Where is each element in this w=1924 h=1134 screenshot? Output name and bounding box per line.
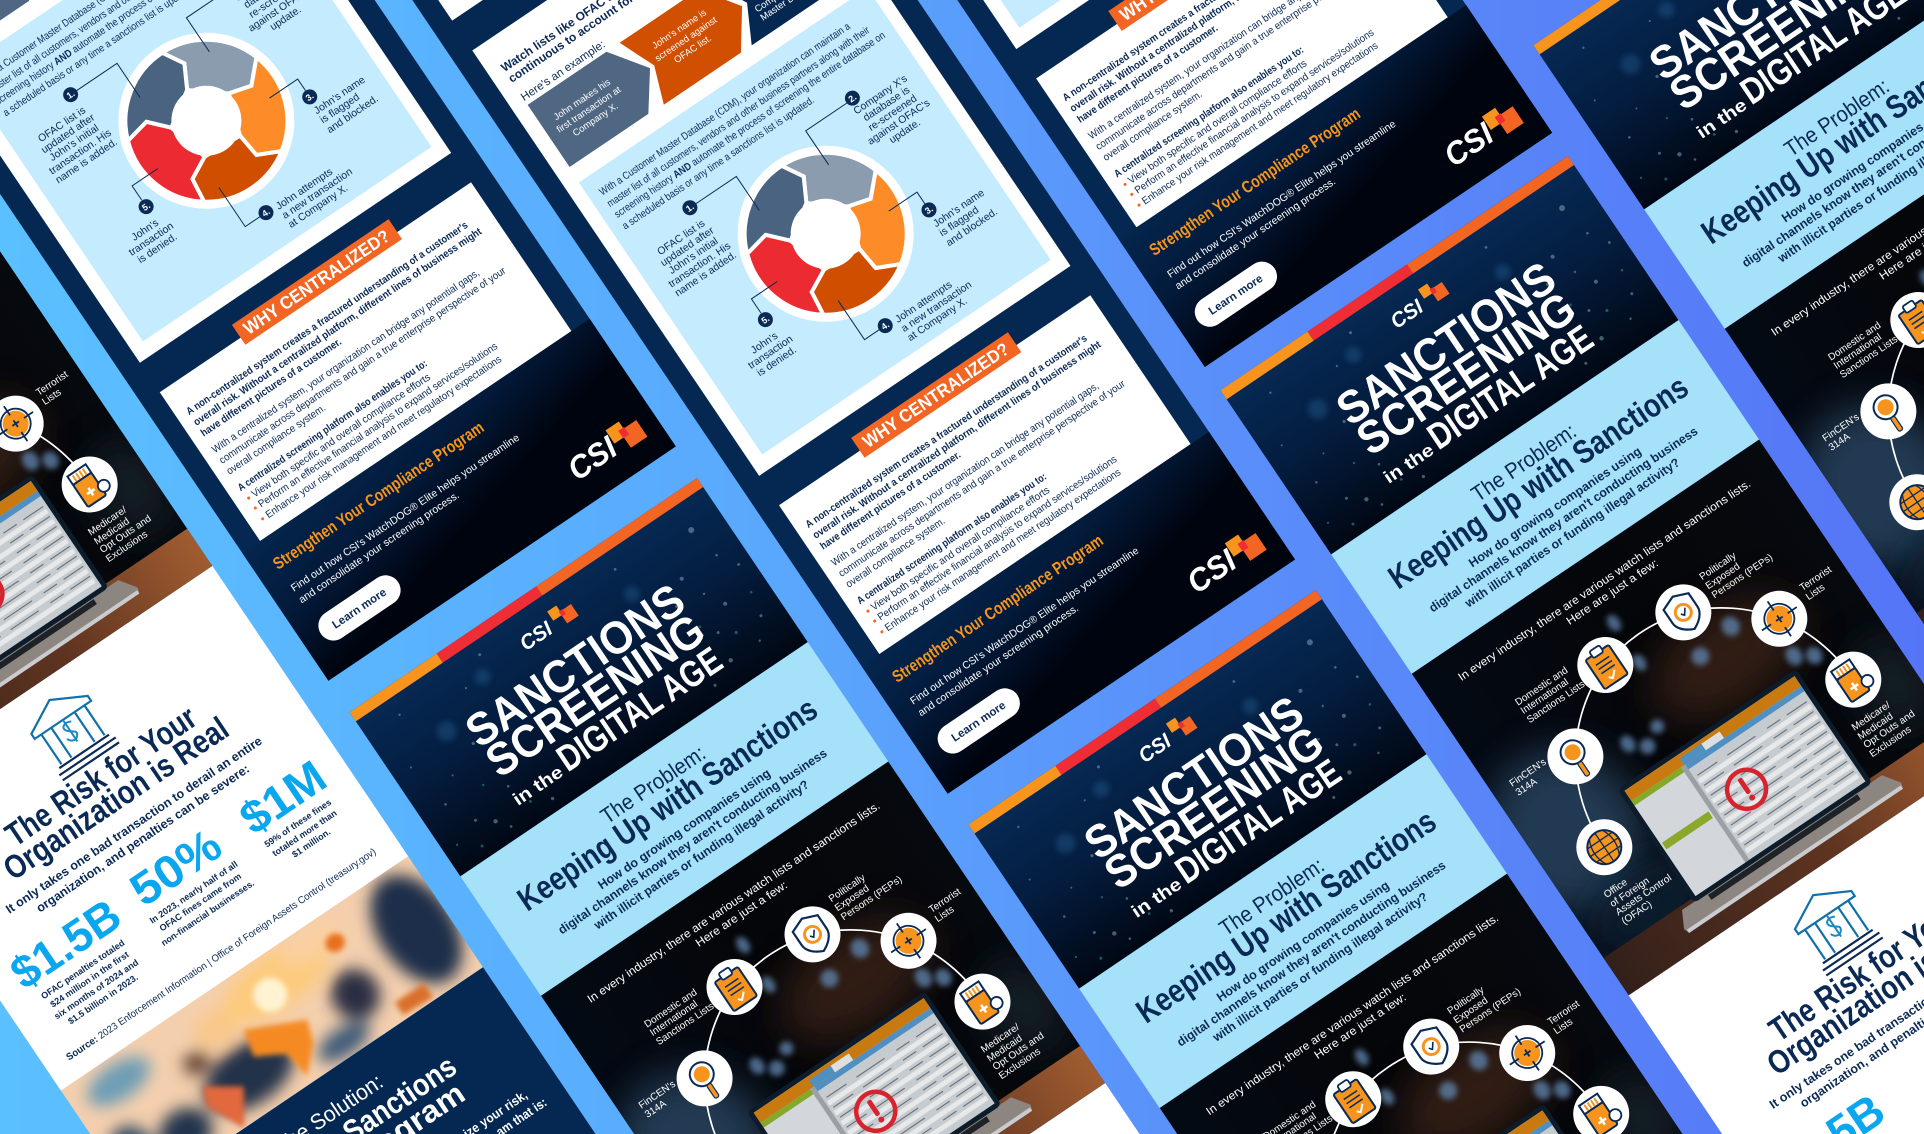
callouts: cycle steps: OFAC list is xyxy=(36,104,88,145)
band: the problem: with illicit parties or funding illegal activity? xyxy=(1462,455,1682,611)
photo section with icons xyxy=(512,753,1119,1134)
header: CSI xyxy=(1386,295,1428,334)
photo section with icons: Terrorist xyxy=(34,369,70,399)
photo section with icons xyxy=(0,235,226,820)
column 2: poster top xyxy=(321,469,1230,1134)
photo section with icons: Assets Control xyxy=(1614,873,1674,918)
callouts: cycle steps: update. xyxy=(887,117,923,146)
panel: why centralized: overall risk. Without a centralized platform, different lines of business might xyxy=(191,225,484,428)
callouts: cycle steps: is flagged xyxy=(937,204,981,239)
panel: strengthen your compliance program: Learn more xyxy=(950,700,1008,745)
header xyxy=(1533,0,1924,209)
text: risk intro: It only takes one bad transaction to derail an entire xyxy=(3,734,265,917)
header: SANCTIONS xyxy=(1075,685,1313,869)
photo section with icons: Opt Outs and xyxy=(98,513,153,556)
panel: risk white top xyxy=(758,1083,1217,1134)
callouts: cycle steps: 5. xyxy=(759,313,771,326)
panel: why centralized: have different pictures of a customer. xyxy=(818,449,963,552)
arrow: step one: Company X. xyxy=(571,101,620,139)
header: in the xyxy=(1380,440,1437,487)
panel: why centralized: communicate across departments and gain a true enterprise perspective of your xyxy=(836,378,1128,580)
callouts: cycle steps: a new transaction xyxy=(280,166,355,222)
photo section with icons: Exposed xyxy=(1704,561,1742,592)
photo section with icons: Opt Outs and xyxy=(991,1031,1046,1073)
panel: why centralized: have different pictures of a customer. xyxy=(1075,22,1220,126)
band: the problem: How do growing companies using xyxy=(595,766,773,892)
callouts: cycle steps: at Company X. xyxy=(286,182,350,231)
stat: $1M: 59% of these fines xyxy=(262,797,333,849)
source line: Source: 2023 Enforcement Information | Office of Foreign Assets Control (treasury.gov) xyxy=(65,847,378,1063)
header: CSI xyxy=(1134,729,1176,768)
header: CSI xyxy=(516,617,558,656)
panel: strengthen your compliance program: Learn more xyxy=(1207,273,1265,318)
callouts: cycle steps: John's initial xyxy=(667,235,720,277)
callouts: cycle steps: is flagged xyxy=(318,91,362,126)
column 2: lower half of previous poster xyxy=(0,0,676,681)
callouts: cycle steps: John attempts xyxy=(893,279,954,326)
panel: strengthen your compliance program: CSI xyxy=(1437,115,1501,174)
header: DIGITAL AGE xyxy=(549,639,730,779)
callouts: cycle steps: database is xyxy=(861,84,912,124)
panel: why centralized: have different pictures of a customer. xyxy=(199,336,344,439)
photo section with icons: FinCEN's xyxy=(1821,412,1862,444)
header xyxy=(968,590,1426,989)
photo section with icons: Medicaid xyxy=(985,1033,1025,1065)
panel: why centralized: Enhance your risk management and meet regulatory expectations xyxy=(263,353,504,521)
callouts: cycle steps: 4. xyxy=(879,319,891,332)
photo section with icons: Terrorist xyxy=(1798,564,1834,594)
band: the problem: Keeping Up with Sanctions xyxy=(1129,802,1443,1030)
photo section with icons: Office xyxy=(1602,877,1630,901)
callouts: cycle steps: John's name xyxy=(312,74,368,117)
heading: risk: Organization is Real xyxy=(0,709,235,887)
callouts: cycle steps: update. xyxy=(268,4,304,33)
callouts: cycle steps: is denied. xyxy=(135,231,179,266)
band: the problem: digital channels know they aren't conducting business xyxy=(556,746,830,937)
panel: why centralized: Enhance your risk management and meet regulatory expectations xyxy=(1140,40,1380,207)
header: SCREENING xyxy=(476,603,714,787)
text: intro: screening history AND automate the process of screening the entire database on xyxy=(612,29,888,221)
panel: strengthen your compliance program: and consolidate your screening process. xyxy=(1173,176,1338,292)
band: the problem xyxy=(1644,0,1924,329)
column 5: poster top xyxy=(1504,0,1924,670)
panel: why centralized: Perform an effective financial analysis to expand services/solutions xyxy=(875,453,1119,623)
callouts: cycle steps xyxy=(636,58,1036,438)
header: in the xyxy=(1693,95,1750,142)
panel: previous white block xyxy=(350,0,763,21)
panel: strengthen your compliance program: Find out how CSI's WatchDOG® Elite helps you streamline xyxy=(1165,118,1398,281)
photo section with icons: (OFAC) xyxy=(1620,899,1654,927)
band: the problem: The Problem: xyxy=(596,740,710,829)
heading: risk: The Risk for Your xyxy=(0,698,203,853)
callouts: cycle steps: transaction xyxy=(746,333,795,372)
arrow: step two xyxy=(620,0,763,106)
panel: strengthen your compliance program: CSI xyxy=(561,428,624,487)
panel: the risk for your organization xyxy=(0,566,409,1091)
photo section with icons: Politically xyxy=(827,872,868,905)
band: the problem xyxy=(1079,754,1507,1108)
image: world map at sunset xyxy=(61,854,486,1134)
column 1 xyxy=(0,251,596,1134)
header: SCREENING xyxy=(1095,715,1333,899)
photo section with icons: 314A xyxy=(1514,776,1540,799)
callouts: cycle steps: and blocked. xyxy=(325,93,381,136)
panel: strengthen your compliance program: Strengthen Your Compliance Program xyxy=(269,418,487,573)
panel: why centralized: overall compliance system. xyxy=(844,515,947,590)
panel: why centralized: With a centralized system, your organization can bridge any potential gaps, xyxy=(829,380,1101,569)
photo section with icons: Sanctions Lists xyxy=(1838,334,1900,381)
photo section with icons: Exposed xyxy=(1452,995,1490,1026)
band: the problem: The Problem: xyxy=(1780,73,1894,162)
stat: $1M: $1M xyxy=(230,750,335,844)
photo section with icons: Politically xyxy=(1698,550,1738,583)
map: continents xyxy=(200,929,436,1130)
photo section with icons: FinCEN's xyxy=(637,1079,678,1111)
photo section with icons: Domestic and xyxy=(643,987,699,1030)
arrow: step three xyxy=(709,0,859,45)
photo section with icons: Medicaid xyxy=(92,516,132,547)
panel: why centralized xyxy=(770,282,1191,654)
stat: 50%: 50% xyxy=(120,818,231,916)
callouts: cycle steps: updated after xyxy=(39,111,97,156)
callouts: cycle steps: 1. xyxy=(684,201,696,214)
photo section with icons: In every industry, there are various watch lists and sanctions lists. xyxy=(586,800,882,1006)
stat: 50%: OFAC fines came from xyxy=(158,871,243,933)
callouts: cycle steps: is denied. xyxy=(755,344,799,379)
panel: why centralized: Perform an effective financial analysis to expand services/solutions xyxy=(1133,27,1376,197)
callouts: cycle steps: transaction. His xyxy=(47,127,114,177)
panel: why centralized: With a centralized system, your organization can bridge any potential gaps, xyxy=(210,267,482,456)
text: risk intro: organization, and penalties can be severe: xyxy=(34,762,252,915)
callouts: cycle steps: updated after xyxy=(658,224,717,269)
stat: $1.5B: six months of 2024 and xyxy=(52,957,140,1021)
column 3: poster top xyxy=(939,581,1737,1134)
panel: why centralized: Enhance your risk management and meet regulatory expectations xyxy=(883,466,1123,634)
panel: why centralized xyxy=(151,169,571,541)
callouts: cycle steps: John's xyxy=(129,217,161,244)
header: DIGITAL AGE xyxy=(1420,317,1601,457)
photo section with icons: Persons (PEPs) xyxy=(839,874,904,923)
photo section with icons: Sanctions Lists xyxy=(1525,679,1587,726)
stat: $1M: $1 million. xyxy=(290,827,332,860)
header: SANCTIONS xyxy=(1327,251,1565,435)
callouts: cycle steps: against OFAC's xyxy=(865,97,932,148)
photo section with icons: Exclusions xyxy=(104,529,150,565)
photo section with icons: Terrorist xyxy=(1546,998,1582,1028)
panel: strengthen your compliance program: Find out how CSI's WatchDOG® Elite helps you streamline xyxy=(908,545,1141,707)
photo section with icons: Exclusions xyxy=(1868,724,1914,760)
panel: why centralized: View both specific and overall compliance efforts xyxy=(1126,58,1309,187)
panel: example frame xyxy=(887,0,1328,49)
arrow: step one: first transaction at xyxy=(555,84,623,135)
arrow: step two: OFAC list. xyxy=(672,33,714,66)
panel: navy backing xyxy=(0,0,676,681)
stat: $1.5B: OFAC penalties totaled xyxy=(39,938,126,1001)
panel: customer master database example xyxy=(472,0,1084,476)
column 3: lower half of previous poster xyxy=(333,0,1295,794)
photo section with icons: Lists xyxy=(1552,1016,1575,1037)
band: the problem xyxy=(1331,320,1759,674)
photo section with icons: Opt Outs and xyxy=(1862,709,1917,751)
panel: why centralized: View both specific and overall compliance efforts xyxy=(249,371,433,500)
callouts: cycle steps: John attempts xyxy=(274,166,335,213)
panel: why centralized xyxy=(1027,0,1448,227)
callouts: cycle steps: a new transaction xyxy=(899,279,974,335)
stat: 50%: In 2023, nearly half of all xyxy=(148,859,240,925)
panel: why centralized: A centralized screening platform also enables you to: xyxy=(855,471,1049,607)
callouts: cycle steps: 3. xyxy=(923,204,935,216)
photo section with icons: Lists xyxy=(1804,582,1827,603)
photo section with icons xyxy=(1131,865,1737,1134)
panel: strengthen your compliance program: Find out how CSI's WatchDOG® Elite helps you streamline xyxy=(289,432,522,594)
band: the problem: digital channels know they aren't conducting business xyxy=(1426,424,1700,615)
callouts: cycle steps: 5. xyxy=(140,200,152,213)
panel: strengthen your compliance program xyxy=(242,319,676,681)
arrow: step two: John's name is xyxy=(650,7,709,52)
panel: why centralized: WHY CENTRALIZED? xyxy=(859,339,1013,452)
band: the problem: The Problem: xyxy=(1214,853,1329,941)
callouts: cycle steps: 4. xyxy=(260,206,272,219)
stat: $1.5B: $1.5 billion in 2023. xyxy=(66,972,140,1026)
band: the problem xyxy=(460,642,888,996)
column 4: poster xyxy=(1191,147,1924,1134)
panel: customer master database example: Here's an example: xyxy=(519,39,608,104)
header xyxy=(1220,156,1679,554)
panel: strengthen your compliance program: CSI xyxy=(1180,542,1243,600)
arrow: step one xyxy=(528,37,671,167)
photo section with icons: 314A xyxy=(1827,431,1853,454)
photo section with icons: Here are just a few: xyxy=(1312,992,1409,1062)
photo section with icons: Terrorist xyxy=(927,886,963,916)
photo section with icons: Here are just a few: xyxy=(1565,557,1661,628)
callouts: cycle steps: John's initial xyxy=(47,122,101,164)
band: the problem: with illicit parties or funding illegal activity? xyxy=(591,777,812,933)
photo section with icons: of Foreign xyxy=(1608,876,1652,910)
band: the problem: with illicit parties or funding illegal activity? xyxy=(1209,890,1430,1045)
photo section with icons: Medicare/ xyxy=(979,1022,1022,1055)
panel: why centralized: communicate across departments and gain a true enterprise perspective of your xyxy=(217,265,509,467)
photo section with icons: Here are just a few: xyxy=(694,879,790,950)
stat: $1.5B: $24 million in the first xyxy=(48,949,131,1009)
photo section with icons: 314A xyxy=(643,1098,669,1121)
header: SANCTIONS xyxy=(456,573,694,757)
photo section with icons: Persons (PEPs) xyxy=(1458,986,1523,1035)
text: intro: a scheduled basis or any time a sanctions list is updated. xyxy=(620,94,817,232)
photo section with icons: International xyxy=(1519,677,1571,717)
callouts: cycle steps xyxy=(17,0,416,325)
header: DIGITAL AGE xyxy=(1168,751,1348,891)
stat: 50% xyxy=(116,814,256,948)
panel: customer master database example xyxy=(0,0,451,363)
header: SCREENING xyxy=(1347,281,1585,465)
panel: strengthen your compliance program xyxy=(862,432,1295,794)
callouts: cycle steps: name is added. xyxy=(673,249,739,299)
icon: bank xyxy=(21,681,119,780)
panel: strengthen your compliance program: and consolidate your screening process. xyxy=(916,602,1081,719)
photo section with icons: Exposed xyxy=(833,883,871,914)
photo section with icons xyxy=(1696,86,1924,670)
panel: why centralized: A non-centralized system creates a fractured understanding of a customer's xyxy=(184,219,470,418)
panel: strengthen your compliance program: Strengthen Your Compliance Program xyxy=(1146,104,1364,260)
band: the problem: Keeping Up with Sanctions xyxy=(510,690,824,918)
header: in the xyxy=(509,762,567,810)
panel: why centralized: overall risk. Without a centralized platform, different lines of business might xyxy=(811,338,1104,542)
callouts: cycle steps: transaction. His xyxy=(666,240,733,290)
panel: why centralized: A non-centralized system creates a fractured understanding of a customer's xyxy=(803,332,1090,531)
photo section with icons: In every industry, there are various watch lists and sanctions lists. xyxy=(1456,478,1753,684)
chart: five-step cycle xyxy=(704,112,948,356)
panel: why centralized: WHY CENTRALIZED? xyxy=(240,226,393,339)
callouts: cycle steps: re-screened xyxy=(866,92,919,134)
callouts: cycle steps: OFAC list is xyxy=(655,217,707,258)
photo section with icons: Politically xyxy=(1446,985,1486,1017)
chart: five-step cycle xyxy=(84,0,329,243)
panel: why centralized: View both specific and overall compliance efforts xyxy=(869,484,1052,613)
photo section with icons: Medicare/ xyxy=(1850,700,1893,733)
arrow: step two: screened against xyxy=(653,15,720,64)
callouts: cycle steps: 3. xyxy=(304,91,316,103)
photo section with icons: International xyxy=(1832,332,1884,372)
photo section with icons: Exclusions xyxy=(997,1046,1043,1082)
panel: navy backing xyxy=(869,0,1552,367)
panel: the risk for your organization xyxy=(1629,761,1924,1134)
band: the problem: digital channels know they aren't conducting business xyxy=(1174,858,1448,1049)
callouts: cycle steps: Company X's xyxy=(851,73,909,117)
arrow: step one: John makes his xyxy=(552,77,613,123)
photo section with icons: Lists xyxy=(933,904,956,925)
stat: $1M xyxy=(230,750,354,872)
callouts: cycle steps: 2. xyxy=(846,92,858,104)
stat: $1M: totaled more than xyxy=(270,808,339,858)
photo section with icons: Domestic and xyxy=(1513,665,1570,708)
header xyxy=(350,478,808,876)
callouts: cycle steps: name is added. xyxy=(53,136,120,186)
column 4: lower half of previous poster xyxy=(869,0,1552,367)
panel: why centralized: overall compliance system. xyxy=(224,402,328,477)
stat: 50%: non-financial businesses. xyxy=(159,878,256,948)
photo section with icons: Domestic and xyxy=(1826,320,1883,363)
band: the problem: How do growing companies using xyxy=(1214,878,1392,1004)
photo section with icons: Lists xyxy=(40,387,64,408)
stat: $1.5B xyxy=(1,888,156,1037)
panel: navy backing xyxy=(333,0,1295,794)
panel: strengthen your compliance program xyxy=(1119,5,1552,367)
photo section with icons: Sanctions Lists xyxy=(654,1001,716,1048)
panel: strengthen your compliance program: and consolidate your screening process. xyxy=(297,489,462,606)
panel: strengthen your compliance program: Learn more xyxy=(330,587,389,631)
callouts: cycle steps: at Company X. xyxy=(905,295,970,344)
callouts: cycle steps: 1. xyxy=(65,88,77,101)
panel: why centralized: Perform an effective financial analysis to expand services/solutions xyxy=(256,340,500,510)
panel: why centralized: A centralized screening platform also enables you to: xyxy=(236,358,430,494)
band: the problem: The Problem: xyxy=(1467,418,1581,507)
callouts: cycle steps: John's xyxy=(749,330,780,357)
panel: why centralized: A centralized screening platform also enables you to: xyxy=(1112,44,1306,180)
band: the problem: How do growing companies using xyxy=(1466,444,1644,570)
photo section with icons: Medicaid xyxy=(1856,711,1895,743)
photo section with icons: International xyxy=(648,999,700,1039)
header: in the xyxy=(1128,874,1185,922)
callouts: cycle steps: and blocked. xyxy=(944,206,1000,249)
photo section with icons: FinCEN's xyxy=(1508,757,1549,789)
icon: bank xyxy=(1785,876,1883,976)
panel: the solution xyxy=(136,967,651,1134)
photo section with icons: Medicare/ xyxy=(86,505,129,538)
photo section with icons: Persons (PEPs) xyxy=(1710,552,1775,601)
photo section with icons: In every industry, there are various watch lists and sanctions lists. xyxy=(1204,912,1501,1118)
panel: why centralized: overall compliance system. xyxy=(1101,88,1204,164)
stat: $1.5B: $1.5B xyxy=(1,888,130,999)
callouts: cycle steps: John's name xyxy=(931,187,987,230)
band: the problem: Keeping Up with Sanctions xyxy=(1381,368,1695,596)
callouts: cycle steps: transaction xyxy=(127,220,176,259)
photo section with icons xyxy=(1383,431,1924,1015)
panel: strengthen your compliance program: Strengthen Your Compliance Program xyxy=(889,531,1107,686)
